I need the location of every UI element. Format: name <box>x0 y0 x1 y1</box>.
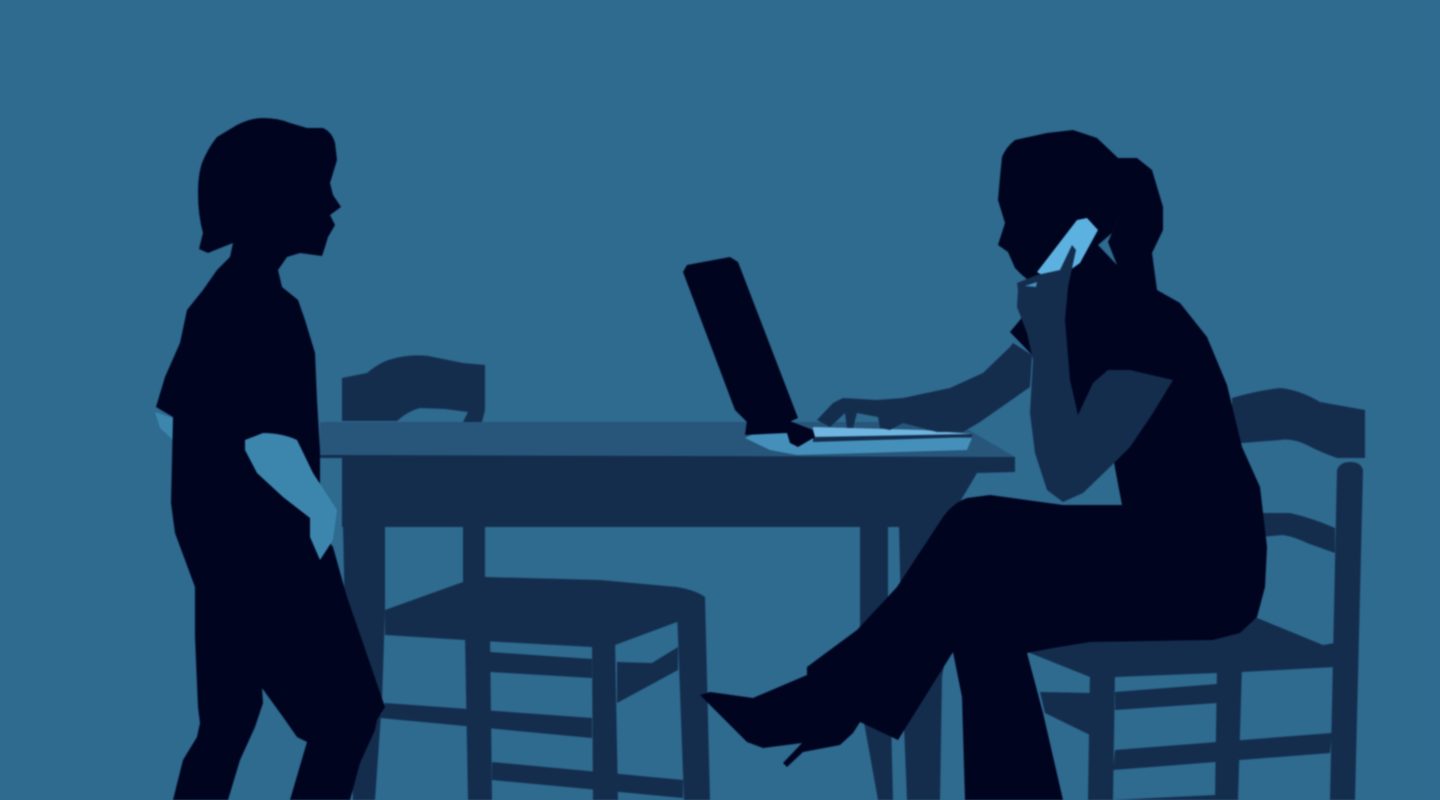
hair gap near ear <box>1098 205 1124 265</box>
seat <box>385 577 705 647</box>
laptop keyboard <box>813 427 972 439</box>
laptop base <box>745 432 972 455</box>
woman <box>700 130 1267 800</box>
laptop hinge <box>745 420 815 447</box>
woman typing arm <box>817 343 1032 432</box>
light spot between fingers <box>1025 282 1037 287</box>
chair legs <box>1088 665 1242 800</box>
laptop screen <box>683 257 798 423</box>
back chair behind table <box>342 355 485 422</box>
front left chair <box>380 577 710 800</box>
boy silhouette <box>156 118 385 800</box>
table edge and apron <box>320 455 1015 527</box>
chair post <box>1330 462 1363 800</box>
laptop <box>683 257 972 455</box>
right chair <box>1030 388 1365 800</box>
chair slat <box>1260 513 1335 553</box>
boy far arm <box>155 412 173 440</box>
table <box>320 422 1015 800</box>
boy <box>155 118 385 800</box>
boy near arm <box>245 433 337 560</box>
rungs <box>380 647 683 798</box>
woman body silhouette <box>700 130 1267 800</box>
chair rungs <box>1040 684 1332 800</box>
table legs <box>343 525 945 800</box>
chair seat <box>1030 615 1335 677</box>
woman phone arm <box>1017 245 1173 502</box>
laptop front edge <box>813 434 972 442</box>
phone <box>1037 218 1098 282</box>
legs <box>465 597 710 800</box>
table top <box>320 422 1015 457</box>
chair top rail <box>1232 388 1365 458</box>
